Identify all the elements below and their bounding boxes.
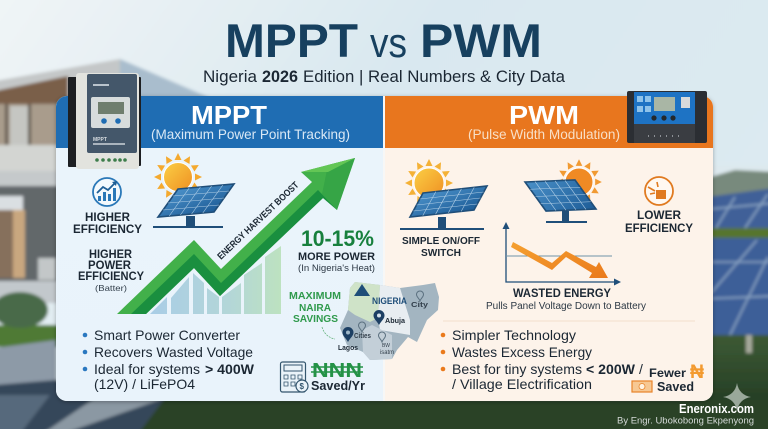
- icon: building: [354, 284, 370, 296]
- chart: bars under the arrow: [150, 246, 281, 314]
- icon: city pins: [342, 291, 424, 342]
- savings: fewer naira saved: Saved: [657, 379, 694, 394]
- footer credit: [617, 401, 754, 426]
- icon: calculator: [280, 362, 308, 392]
- label: higher power efficiency: [78, 249, 144, 293]
- stat: 10-15% more power: (In Nigeria's Heat): [298, 263, 375, 274]
- subtitle: Edition | Real Numbers & City Data: [303, 67, 566, 86]
- bullet list: PWM: < 200W: [586, 361, 636, 377]
- map: Nigeria: [338, 282, 439, 360]
- title: vs: [370, 19, 407, 66]
- city labels: NIGERIA: [372, 296, 407, 306]
- icon: lower efficiency: [645, 177, 673, 205]
- bullet list: MPPT: > 400W: [205, 361, 255, 377]
- bullet list: PWM: /: [639, 361, 643, 377]
- panel: MPPT: [56, 96, 383, 401]
- label: higher efficiency: EFFICIENCY: [73, 222, 142, 236]
- PWM header text: [468, 100, 620, 142]
- label: higher power efficiency: HIGHER: [89, 249, 133, 261]
- city labels: City: [411, 302, 428, 309]
- footer credit: Eneronix.com: [679, 401, 754, 416]
- city labels: isatm: [380, 349, 394, 356]
- arrow label: ENERGY HARVEST BOOST: [215, 180, 302, 262]
- PWM header text: (Pulse Width Modulation): [468, 127, 620, 142]
- icon: sparkle: [723, 383, 751, 411]
- bullet list: MPPT: [83, 327, 255, 392]
- icon: banknote: [632, 381, 652, 392]
- bullet list: PWM: Best for tiny systems: [452, 361, 582, 377]
- city labels: [338, 296, 428, 356]
- subtitle: Nigeria: [203, 67, 258, 86]
- label: maximum naira savings: NAIRA: [299, 302, 331, 314]
- icon: MPPT controller: [68, 73, 141, 169]
- chart: wasted energy: [502, 222, 621, 286]
- label: lower efficiency: LOWER: [637, 208, 681, 222]
- label: maximum naira savings: [289, 290, 341, 325]
- label: simple on/off switch: SWITCH: [421, 247, 461, 259]
- savings: naira saved per year: NNN: [312, 360, 362, 382]
- label: maximum naira savings: SAVINGS: [293, 313, 338, 325]
- savings: naira saved per year: [311, 360, 365, 393]
- icon: sun and panel, on/off: [400, 159, 487, 230]
- icon: PWM controller: [627, 91, 707, 143]
- comparison card: [56, 96, 713, 401]
- label: maximum naira savings: MAXIMUM: [289, 290, 341, 302]
- bullet list: MPPT: Recovers Wasted Voltage: [94, 344, 253, 360]
- PWM header text: PWM: [509, 100, 579, 130]
- label: lower efficiency: EFFICIENCY: [625, 221, 693, 235]
- MPPT header text: (Maximum Power Point Tracking): [151, 126, 350, 142]
- bullet list: MPPT: (12V) / LiFePO4: [94, 376, 195, 392]
- PWM header band: [385, 96, 713, 148]
- bullet list: PWM: Simpler Technology: [452, 327, 576, 343]
- MPPT header text: [151, 100, 350, 142]
- city labels: Lagos: [338, 343, 358, 352]
- bullet list: MPPT: Smart Power Converter: [94, 327, 240, 343]
- city labels: BW: [382, 343, 390, 349]
- bullet list: MPPT: Ideal for systems: [94, 361, 200, 377]
- label: wasted energy: Pulls Panel Voltage Down to Battery: [486, 301, 646, 312]
- title: MPPT: [225, 15, 358, 68]
- city labels: Abuja: [385, 316, 406, 325]
- title: PWM: [420, 15, 542, 68]
- arrow: energy harvest boost: [117, 158, 355, 314]
- label: higher efficiency: [73, 210, 142, 236]
- bullet list: PWM: [441, 327, 643, 392]
- icon: MPPT controller: MPPT: [93, 137, 107, 143]
- savings: fewer naira saved: ₦: [690, 362, 704, 383]
- label: higher power efficiency: EFFICIENCY: [78, 271, 144, 283]
- panel: PWM: [385, 96, 713, 401]
- label: simple on/off switch: [402, 235, 481, 259]
- label: wasted energy: WASTED ENERGY: [513, 286, 611, 300]
- icon: higher efficiency chart: [93, 178, 121, 206]
- label: lower efficiency: [625, 208, 693, 235]
- icon: sun and solar panel: [153, 153, 234, 228]
- icon: calculator: $: [300, 382, 304, 391]
- label: higher power efficiency: POWER: [88, 260, 132, 272]
- MPPT header band: [56, 96, 383, 148]
- arrow: savings pointer: [322, 327, 335, 339]
- subtitle: 2026: [262, 67, 298, 86]
- label: higher power efficiency: (Batter): [95, 283, 127, 293]
- label: simple on/off switch: SIMPLE ON/OFF: [402, 235, 481, 247]
- savings: fewer naira saved: Fewer: [649, 366, 686, 380]
- bullet list: PWM: / Village Electrification: [452, 376, 592, 392]
- savings: fewer naira saved: [632, 362, 704, 394]
- bullet list: PWM: Wastes Excess Energy: [452, 344, 592, 360]
- icon: sun behind tilted panel: [525, 159, 602, 223]
- stat: 10-15% more power: [298, 226, 375, 274]
- stat: 10-15% more power: MORE POWER: [298, 251, 375, 263]
- title: [225, 15, 542, 68]
- savings: naira saved per year: Saved/Yr: [311, 378, 365, 393]
- MPPT header text: MPPT: [191, 100, 267, 130]
- footer credit: By Engr. Ubokobong Ekpenyong: [617, 416, 754, 426]
- label: wasted energy: [486, 286, 646, 312]
- city labels: Cities: [354, 331, 371, 340]
- stat: 10-15% more power: 10-15%: [301, 226, 374, 251]
- label: higher efficiency: HIGHER: [85, 210, 130, 224]
